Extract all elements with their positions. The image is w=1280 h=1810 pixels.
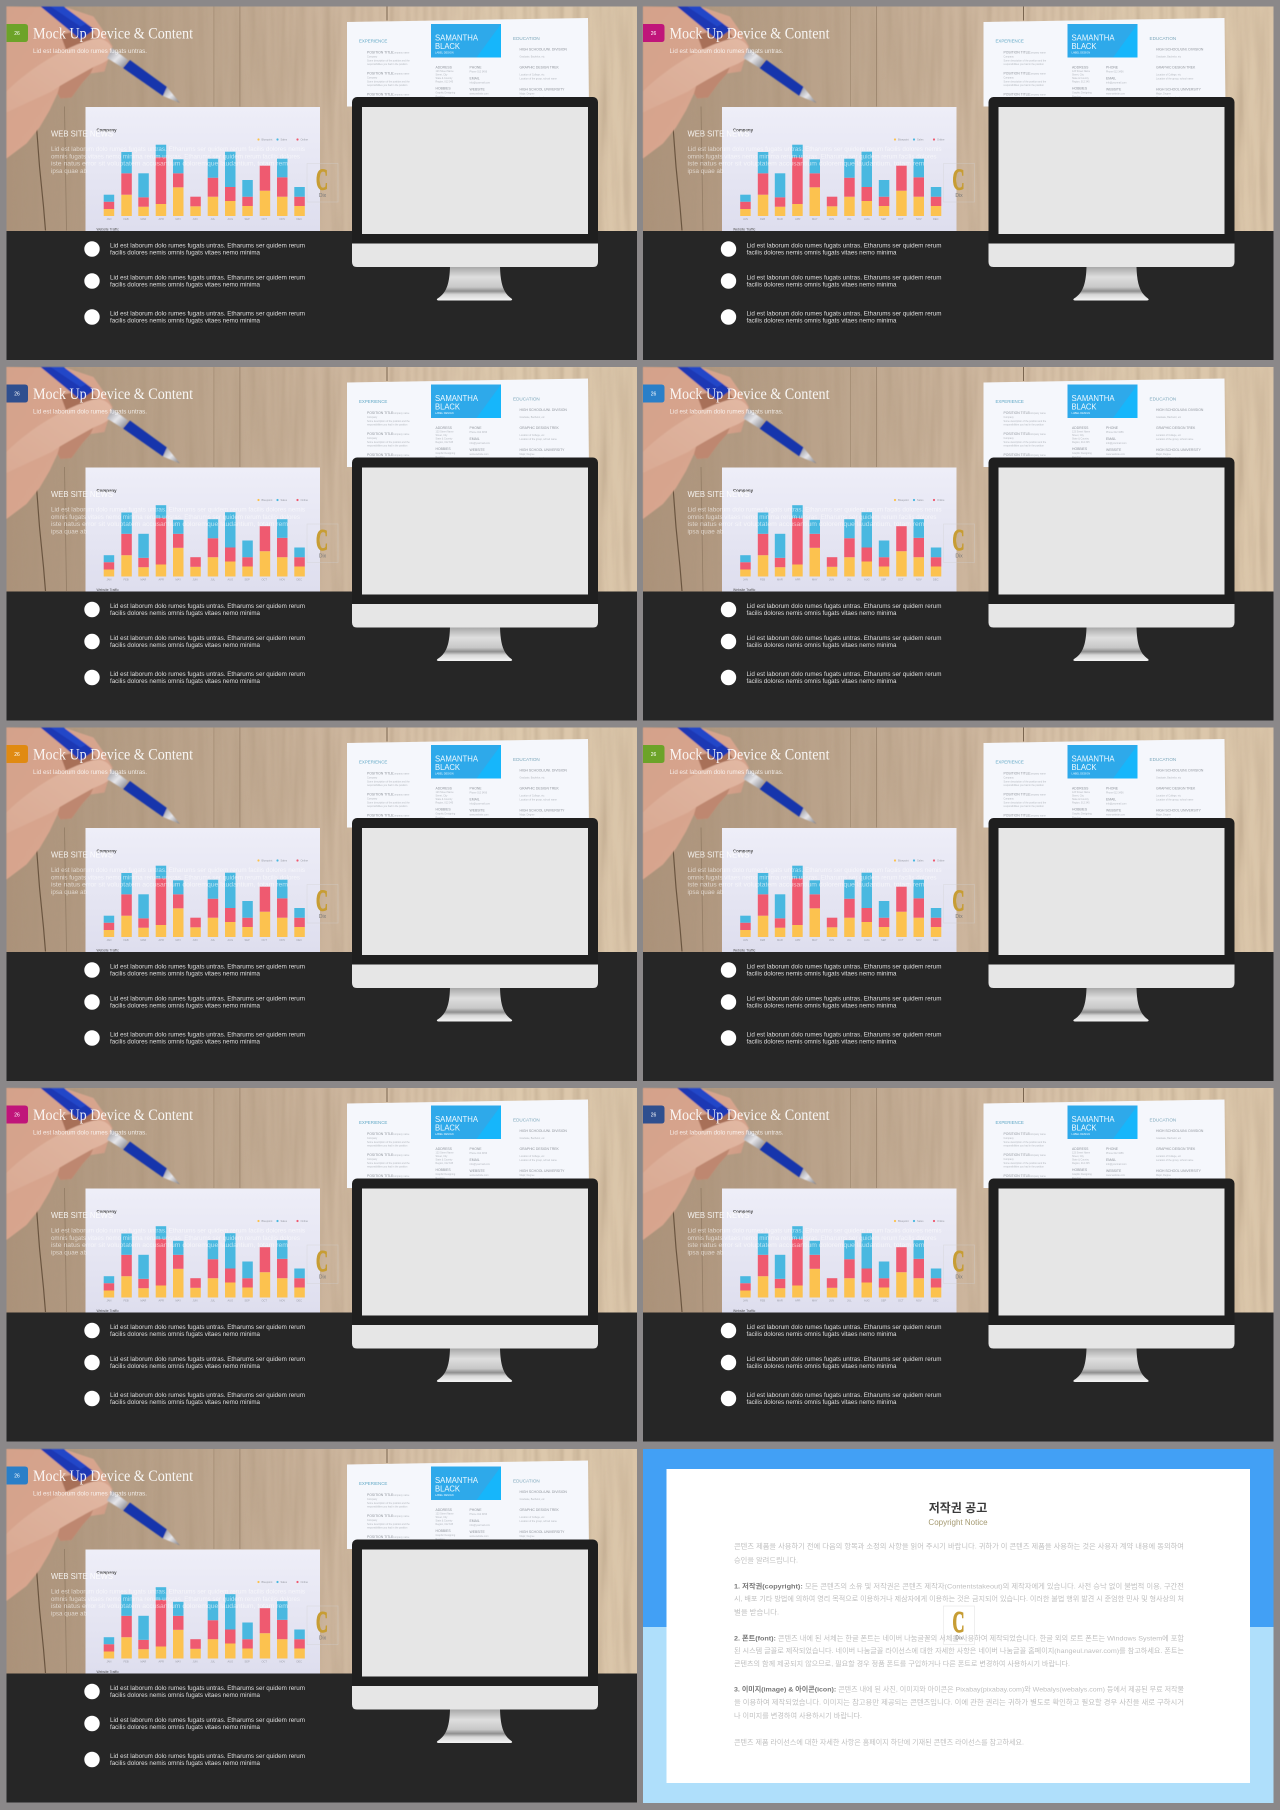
bullet list: facilis dolores nemis omnis fugats vitaes nemo minima — [746, 678, 897, 685]
number tag: 26 — [651, 31, 656, 37]
watermark logo — [944, 162, 974, 202]
body paragraph — [688, 1228, 942, 1257]
bullet list: facilis dolores nemis omnis fugats vitaes nemo minima — [110, 317, 260, 324]
bullet list: Lid est laborum dolo rumes fugats untras. Etharums ser quidem rerum — [110, 963, 305, 970]
monitor mockup — [352, 97, 598, 300]
body paragraph: omnis fugats vitaes nemo minima rerum unsras. Etharums ser quidem rerum facilis dolores — [51, 514, 301, 521]
dark band — [6, 952, 637, 1081]
dark band — [6, 231, 637, 360]
bullet list: Lid est laborum dolo rumes fugats untras. Etharums ser quidem rerum — [110, 310, 305, 317]
slide 9 — [6, 1449, 637, 1802]
subtitle: Lid est laborum dolo rumes fugats untras. — [670, 769, 784, 776]
body paragraph: Lid est laborum dolo rumes fugats untras. Etharums ser quidem rerum facilis dolores nemis — [688, 867, 942, 874]
section 1: copyright — [734, 1582, 1184, 1616]
title: Mock Up Device & Content — [33, 386, 194, 403]
bullet list: facilis dolores nemis omnis fugats vitaes nemo minima — [110, 642, 260, 649]
section 1: copyright: 1. 저작권(copyright): 모든 콘텐츠의 소유 및 저작권은 콘텐츠 제작자(Contentstakeout)의 제작자에게 있습니다. 사전 승낙 없이 불법적 이용, 구간전 — [734, 1582, 1184, 1590]
slide 5 — [6, 728, 637, 1081]
body paragraph: iste natus error sit voluptatem accusantium doloremque laudantium, totam rem — [51, 882, 289, 888]
bullet list: Lid est laborum dolo rumes fugats untras. Etharums ser quidem rerum — [110, 1356, 305, 1363]
bar chart paper — [722, 828, 956, 952]
body paragraph: ipsa quae ab — [51, 529, 87, 536]
bar chart paper — [86, 828, 320, 952]
bullet list: Lid est laborum dolo rumes fugats untras. Etharums ser quidem rerum — [110, 671, 305, 678]
number tag — [643, 745, 664, 763]
heading: web site news: WEB SITE NEWS — [51, 128, 113, 138]
bullet list: Lid est laborum dolo rumes fugats untras. Etharums ser quidem rerum — [746, 242, 942, 249]
bullet list: facilis dolores nemis omnis fugats vitaes nemo minima — [746, 281, 897, 288]
bullet list: facilis dolores nemis omnis fugats vitaes nemo minima — [110, 678, 260, 685]
bullet list: facilis dolores nemis omnis fugats vitaes nemo minima — [110, 249, 260, 256]
bullet list: facilis dolores nemis omnis fugats vitaes nemo minima — [110, 1331, 260, 1338]
body paragraph: iste natus error sit voluptatem accusantium doloremque laudantium, totam rem — [688, 521, 925, 528]
monitor mockup — [988, 1178, 1234, 1382]
dark band — [6, 592, 637, 720]
body paragraph: omnis fugats vitaes nemo minima rerum unsras. Etharums ser quidem rerum facilis dolores — [51, 1596, 301, 1603]
bullet list: facilis dolores nemis omnis fugats vitaes nemo minima — [110, 1760, 260, 1767]
monitor mockup — [988, 458, 1234, 661]
bullet list: Lid est laborum dolo rumes fugats untras. Etharums ser quidem rerum — [746, 274, 942, 281]
bullet list — [84, 962, 305, 1046]
subtitle: Lid est laborum dolo rumes fugats untras. — [33, 48, 147, 55]
number tag: 26 — [14, 752, 20, 758]
body paragraph: ipsa quae ab — [51, 1611, 87, 1618]
bullet list: Lid est laborum dolo rumes fugats untras. Etharums ser quidem rerum — [110, 995, 305, 1002]
section 3: image and icon: 을 이용하여 제작되었습니다. 이미지는 참고용만 제공되는 콘텐츠입니다. 이에 관한 권리는 귀하가 별도로 확인하고 필요할 경우 사진을 새로 구하시거 — [734, 1698, 1184, 1706]
bullet list: facilis dolores nemis omnis fugats vitaes nemo minima — [746, 1363, 897, 1370]
body paragraph: iste natus error sit voluptatem accusantium doloremque laudantium, totam rem — [688, 160, 925, 168]
dark band — [6, 1312, 637, 1442]
section 3: image and icon — [734, 1684, 1184, 1720]
intro paragraph — [734, 1542, 1184, 1564]
body paragraph: iste natus error sit voluptatem accusantium doloremque laudantium, totam rem — [51, 1242, 289, 1249]
body paragraph — [51, 867, 306, 896]
wood background — [6, 1449, 637, 1674]
subtitle: Lid est laborum dolo rumes fugats untras. — [33, 769, 147, 776]
bullet list — [721, 1323, 942, 1406]
body paragraph — [51, 146, 306, 175]
bullet list: Lid est laborum dolo rumes fugats untras. Etharums ser quidem rerum — [746, 603, 942, 610]
body paragraph: omnis fugats vitaes nemo minima rerum unsras. Etharums ser quidem rerum facilis dolores — [51, 874, 301, 882]
section 3: image and icon: 3. 이미지(image) & 아이콘(icon): 콘텐츠 내에 된 사진, 이미지와 아이콘은 Pixabay(pixabay.com)와 Webalys(webalys.com) 등에서 제공된 무료 저작물 — [734, 1684, 1184, 1694]
body paragraph — [51, 1228, 306, 1257]
resume paper — [984, 18, 1226, 106]
monitor mockup — [352, 458, 598, 661]
subtitle: Lid est laborum dolo rumes fugats untras. — [670, 408, 784, 416]
body paragraph: Lid est laborum dolo rumes fugats untras. Etharums ser quidem rerum facilis dolores nemis — [688, 507, 942, 514]
hand with pen — [6, 728, 180, 880]
bullet list: Lid est laborum dolo rumes fugats untras. Etharums ser quidem rerum — [110, 603, 305, 610]
body paragraph: iste natus error sit voluptatem accusantium doloremque laudantium, totam rem — [688, 882, 925, 888]
body paragraph — [688, 146, 942, 175]
bar chart paper — [722, 468, 956, 592]
bullet list: facilis dolores nemis omnis fugats vitaes nemo minima — [110, 1363, 260, 1370]
body paragraph: ipsa quae ab — [688, 889, 724, 896]
bullet list: facilis dolores nemis omnis fugats vitaes nemo minima — [110, 1002, 260, 1009]
bullet list: Lid est laborum dolo rumes fugats untras. Etharums ser quidem rerum — [746, 963, 942, 970]
resume paper — [347, 378, 589, 467]
body paragraph: omnis fugats vitaes nemo minima rerum unsras. Etharums ser quidem rerum facilis dolores — [688, 514, 937, 521]
bar chart paper — [86, 468, 320, 592]
bullet list: Lid est laborum dolo rumes fugats untras. Etharums ser quidem rerum — [746, 1356, 942, 1363]
wood background — [6, 6, 637, 232]
bullet list — [84, 1684, 305, 1767]
title: Mock Up Device & Content — [670, 1107, 830, 1124]
section 2: font: 콘텐츠의 함께 제공되지 않으므로, 필요할 경우 정품 폰트를 구입하거나 다른 폰트로 변경하여 사용하시기 바랍니다. — [734, 1659, 1070, 1668]
bullet list: facilis dolores nemis omnis fugats vitaes nemo minima — [110, 1038, 260, 1045]
blue backdrop — [643, 1449, 1274, 1803]
bullet list: Lid est laborum dolo rumes fugats untras. Etharums ser quidem rerum — [110, 1717, 305, 1724]
number tag: 26 — [651, 752, 656, 758]
number tag — [6, 1466, 28, 1484]
bullet list: facilis dolores nemis omnis fugats vitaes nemo minima — [110, 970, 260, 977]
intro paragraph: 콘텐츠 제품을 사용하기 전에 다음의 항목과 소정의 사항을 읽어 주시기 바랍니다. 귀하가 이 콘텐츠 제품을 사용하는 것은 사용자 계약 내용에 동의하여 — [734, 1542, 1184, 1550]
dark band — [643, 231, 1274, 360]
resume paper — [984, 378, 1226, 467]
resume paper — [347, 739, 589, 828]
bullet list: Lid est laborum dolo rumes fugats untras. Etharums ser quidem rerum — [746, 310, 942, 317]
resume paper — [347, 1460, 589, 1549]
bullet list: facilis dolores nemis omnis fugats vitaes nemo minima — [746, 1002, 897, 1009]
body paragraph: Lid est laborum dolo rumes fugats untras. Etharums ser quidem rerum facilis dolores nemis — [51, 146, 306, 153]
bullet list: Lid est laborum dolo rumes fugats untras. Etharums ser quidem rerum — [110, 1031, 305, 1038]
monitor mockup — [352, 1540, 598, 1743]
monitor mockup — [988, 818, 1234, 1022]
hand with pen — [643, 6, 816, 158]
bullet list: Lid est laborum dolo rumes fugats untras. Etharums ser quidem rerum — [746, 1031, 942, 1038]
slide 3 — [6, 367, 637, 720]
bullet list: facilis dolores nemis omnis fugats vitaes nemo minima — [746, 970, 897, 977]
watermark logo — [307, 1604, 338, 1644]
bullet list: Lid est laborum dolo rumes fugats untras. Etharums ser quidem rerum — [110, 635, 305, 642]
white card — [666, 1469, 1250, 1783]
slide 2 — [643, 6, 1274, 360]
slide 1 — [6, 6, 637, 360]
body paragraph: ipsa quae ab — [688, 529, 724, 536]
title: Mock Up Device & Content — [670, 386, 830, 403]
hand with pen — [6, 1449, 180, 1601]
bullet list — [84, 602, 305, 685]
resume paper — [347, 1100, 589, 1188]
number tag — [6, 24, 28, 42]
bullet list: Lid est laborum dolo rumes fugats untras. Etharums ser quidem rerum — [110, 1753, 305, 1760]
wood background — [643, 1088, 1274, 1313]
slide 8 — [643, 1088, 1274, 1442]
bullet list: facilis dolores nemis omnis fugats vitaes nemo minima — [746, 1399, 897, 1406]
body paragraph: Lid est laborum dolo rumes fugats untras. Etharums ser quidem rerum facilis dolores nemis — [51, 507, 306, 514]
body paragraph: iste natus error sit voluptatem accusantium doloremque laudantium, totam rem — [51, 521, 289, 528]
subheading: copyright notice: Copyright Notice — [928, 1518, 988, 1527]
section 1: copyright: 벌을 받습니다. — [734, 1608, 779, 1616]
number tag: 26 — [14, 1112, 20, 1118]
body paragraph — [688, 507, 942, 536]
title: Mock Up Device & Content — [670, 26, 830, 42]
wood background — [643, 728, 1274, 952]
section 3: image and icon: 나 이미지를 변경하여 사용하시기 바랍니다. — [734, 1711, 862, 1720]
bullet list: Lid est laborum dolo rumes fugats untras. Etharums ser quidem rerum — [110, 1392, 305, 1399]
body paragraph: omnis fugats vitaes nemo minima rerum unsras. Etharums ser quidem rerum facilis dolores — [51, 1235, 301, 1242]
dark band — [643, 592, 1274, 720]
bar chart paper — [86, 107, 320, 232]
body paragraph: ipsa quae ab — [51, 168, 87, 175]
slide 7 — [6, 1088, 637, 1442]
bullet list: Lid est laborum dolo rumes fugats untras. Etharums ser quidem rerum — [110, 242, 305, 249]
number tag — [6, 745, 28, 763]
bullet list: facilis dolores nemis omnis fugats vitaes nemo minima — [746, 1038, 897, 1045]
number tag — [643, 1106, 664, 1124]
heading: web site news: WEB SITE NEWS — [688, 1210, 750, 1220]
heading: web site news: WEB SITE NEWS — [51, 489, 113, 499]
resume paper — [347, 18, 589, 106]
slide 4 — [643, 367, 1274, 720]
dark band — [6, 1674, 637, 1802]
watermark logo — [944, 522, 974, 562]
bullet list: Lid est laborum dolo rumes fugats untras. Etharums ser quidem rerum — [110, 274, 305, 281]
bullet list — [721, 602, 942, 685]
subtitle: Lid est laborum dolo rumes fugats untras. — [33, 1130, 147, 1136]
hand with pen — [6, 6, 180, 158]
body paragraph: omnis fugats vitaes nemo minima rerum unsras. Etharums ser quidem rerum facilis dolores — [51, 154, 301, 160]
subtitle: Lid est laborum dolo rumes fugats untras. — [33, 408, 147, 416]
title: Mock Up Device & Content — [33, 746, 194, 764]
body paragraph: ipsa quae ab — [51, 1250, 87, 1257]
watermark logo — [944, 882, 974, 923]
bullet list: Lid est laborum dolo rumes fugats untras. Etharums ser quidem rerum — [746, 1324, 942, 1331]
watermark logo — [944, 1604, 974, 1644]
heading: web site news: WEB SITE NEWS — [688, 489, 750, 499]
body paragraph: ipsa quae ab — [51, 889, 87, 896]
intro paragraph: 승인을 알려드립니다. — [734, 1556, 798, 1564]
body paragraph: omnis fugats vitaes nemo minima rerum unsras. Etharums ser quidem rerum facilis dolores — [688, 874, 937, 882]
bullet list: Lid est laborum dolo rumes fugats untras. Etharums ser quidem rerum — [746, 995, 942, 1002]
subtitle: Lid est laborum dolo rumes fugats untras. — [33, 1490, 147, 1498]
monitor mockup — [352, 818, 598, 1022]
body paragraph — [51, 1589, 306, 1618]
subtitle: Lid est laborum dolo rumes fugats untras. — [670, 48, 784, 55]
monitor mockup — [352, 1178, 598, 1382]
watermark logo — [307, 882, 338, 923]
number tag — [643, 384, 664, 402]
bar chart paper — [722, 1188, 956, 1313]
dark band — [643, 952, 1274, 1081]
resume paper — [984, 739, 1226, 828]
body paragraph: ipsa quae ab — [688, 1250, 724, 1257]
body paragraph: Lid est laborum dolo rumes fugats untras. Etharums ser quidem rerum facilis dolores nemis — [51, 867, 306, 874]
number tag — [6, 1106, 28, 1124]
heading: web site news: WEB SITE NEWS — [688, 128, 750, 138]
slide 6 — [643, 728, 1274, 1081]
number tag: 26 — [651, 1112, 656, 1118]
bullet list: Lid est laborum dolo rumes fugats untras. Etharums ser quidem rerum — [746, 1392, 942, 1399]
body paragraph: omnis fugats vitaes nemo minima rerum unsras. Etharums ser quidem rerum facilis dolores — [688, 154, 937, 160]
bullet list: facilis dolores nemis omnis fugats vitaes nemo minima — [746, 642, 897, 649]
hand with pen — [643, 728, 816, 880]
body paragraph: Lid est laborum dolo rumes fugats untras. Etharums ser quidem rerum facilis dolores nemis — [688, 146, 942, 153]
wood background — [643, 367, 1274, 592]
bar chart paper — [722, 107, 956, 232]
heading: web site news: WEB SITE NEWS — [688, 850, 750, 860]
bullet list — [84, 241, 305, 325]
section 2: font: 2. 폰트(font): 콘텐츠 내에 된 서체는 한글 폰트는 네이버 나눔글꼴의 서체를 사용하여 제작되었습니다. 한글 외의 로트 폰트는 Windows System에 포함 — [734, 1634, 1184, 1642]
heading: web site news: WEB SITE NEWS — [51, 1210, 113, 1220]
section 2: font: 된 시스템 글꼴로 제작되었습니다. 네이버 나눔글꼴 라이선스에 대한 자세한 사항은 네이버 나눔글꼴 홈페이지(hangeul.naver.com)를 참고하세요. 폰트는 — [734, 1646, 1184, 1655]
heading: web site news: WEB SITE NEWS — [51, 1571, 113, 1581]
body paragraph: Lid est laborum dolo rumes fugats untras. Etharums ser quidem rerum facilis dolores nemis — [51, 1589, 306, 1596]
section 1: copyright: 시, 배포 기타 방법에 의하여 영리 목적으로 이용하거나 제삼자에게 이용하는 것은 금지되어 있습니다. 이러한 불법 행위 발견 시 준엄한 민사 및 형사상의 처 — [734, 1594, 1184, 1603]
wood background — [6, 367, 637, 592]
body paragraph — [51, 507, 306, 536]
number tag: 26 — [651, 392, 656, 398]
closing note: 콘텐츠 제품 라이선스에 대한 자세한 사항은 홈페이지 하단에 기재된 콘텐츠 라이선스를 참고하세요. — [734, 1738, 1024, 1746]
wood background — [6, 1088, 637, 1313]
watermark logo — [944, 1243, 974, 1284]
panel: copyright notice — [643, 1449, 1274, 1803]
title: Mock Up Device & Content — [33, 1107, 194, 1124]
hand with pen — [6, 367, 180, 519]
heading: web site news: WEB SITE NEWS — [51, 850, 113, 860]
body paragraph: iste natus error sit voluptatem accusantium doloremque laudantium, totam rem — [688, 1242, 925, 1249]
bar chart paper — [86, 1188, 320, 1313]
title: Mock Up Device & Content — [670, 746, 830, 764]
bullet list: facilis dolores nemis omnis fugats vitaes nemo minima — [110, 1399, 260, 1406]
bullet list: facilis dolores nemis omnis fugats vitaes nemo minima — [746, 249, 897, 256]
body paragraph: iste natus error sit voluptatem accusantium doloremque laudantium, totam rem — [51, 160, 289, 168]
body paragraph — [688, 867, 942, 896]
body paragraph: Lid est laborum dolo rumes fugats untras. Etharums ser quidem rerum facilis dolores nemis — [51, 1228, 306, 1235]
bullet list: facilis dolores nemis omnis fugats vitaes nemo minima — [110, 1692, 260, 1699]
body paragraph: iste natus error sit voluptatem accusantium doloremque laudantium, totam rem — [51, 1603, 289, 1610]
bullet list — [721, 962, 942, 1046]
heading: copyright: 저작권 공고 — [929, 1500, 987, 1515]
body paragraph: Lid est laborum dolo rumes fugats untras. Etharums ser quidem rerum facilis dolores nemis — [688, 1228, 942, 1235]
hand with pen — [6, 1088, 180, 1240]
hand with pen — [643, 1088, 816, 1240]
wood background — [6, 728, 637, 952]
bullet list: facilis dolores nemis omnis fugats vitaes nemo minima — [110, 281, 260, 288]
bar chart paper — [86, 1550, 320, 1674]
resume paper — [984, 1100, 1226, 1188]
bullet list: facilis dolores nemis omnis fugats vitaes nemo minima — [110, 1724, 260, 1731]
number tag: 26 — [14, 31, 20, 37]
bullet list: Lid est laborum dolo rumes fugats untras. Etharums ser quidem rerum — [110, 1685, 305, 1692]
watermark logo — [307, 522, 338, 562]
number tag — [643, 24, 664, 42]
bullet list: Lid est laborum dolo rumes fugats untras. Etharums ser quidem rerum — [746, 635, 942, 642]
number tag — [6, 384, 28, 402]
number tag: 26 — [14, 1474, 20, 1480]
bullet list: Lid est laborum dolo rumes fugats untras. Etharums ser quidem rerum — [746, 671, 942, 678]
dark band — [643, 1312, 1274, 1442]
bullet list — [84, 1323, 305, 1406]
bullet list: Lid est laborum dolo rumes fugats untras. Etharums ser quidem rerum — [110, 1324, 305, 1331]
bullet list: facilis dolores nemis omnis fugats vitaes nemo minima — [746, 610, 897, 617]
bullet list: facilis dolores nemis omnis fugats vitaes nemo minima — [746, 317, 897, 324]
title: Mock Up Device & Content — [33, 1468, 194, 1485]
title: Mock Up Device & Content — [33, 26, 194, 42]
monitor mockup — [988, 97, 1234, 300]
body paragraph: ipsa quae ab — [688, 168, 724, 175]
wood background — [643, 6, 1274, 232]
number tag: 26 — [14, 392, 20, 398]
bullet list — [721, 241, 942, 325]
watermark logo — [307, 1243, 338, 1284]
subtitle: Lid est laborum dolo rumes fugats untras. — [670, 1130, 784, 1136]
watermark logo — [307, 162, 338, 202]
hand with pen — [643, 367, 816, 519]
body paragraph: omnis fugats vitaes nemo minima rerum unsras. Etharums ser quidem rerum facilis dolores — [688, 1235, 937, 1242]
bullet list: facilis dolores nemis omnis fugats vitaes nemo minima — [746, 1331, 897, 1338]
section 2: font — [734, 1634, 1184, 1668]
bullet list: facilis dolores nemis omnis fugats vitaes nemo minima — [110, 610, 260, 617]
